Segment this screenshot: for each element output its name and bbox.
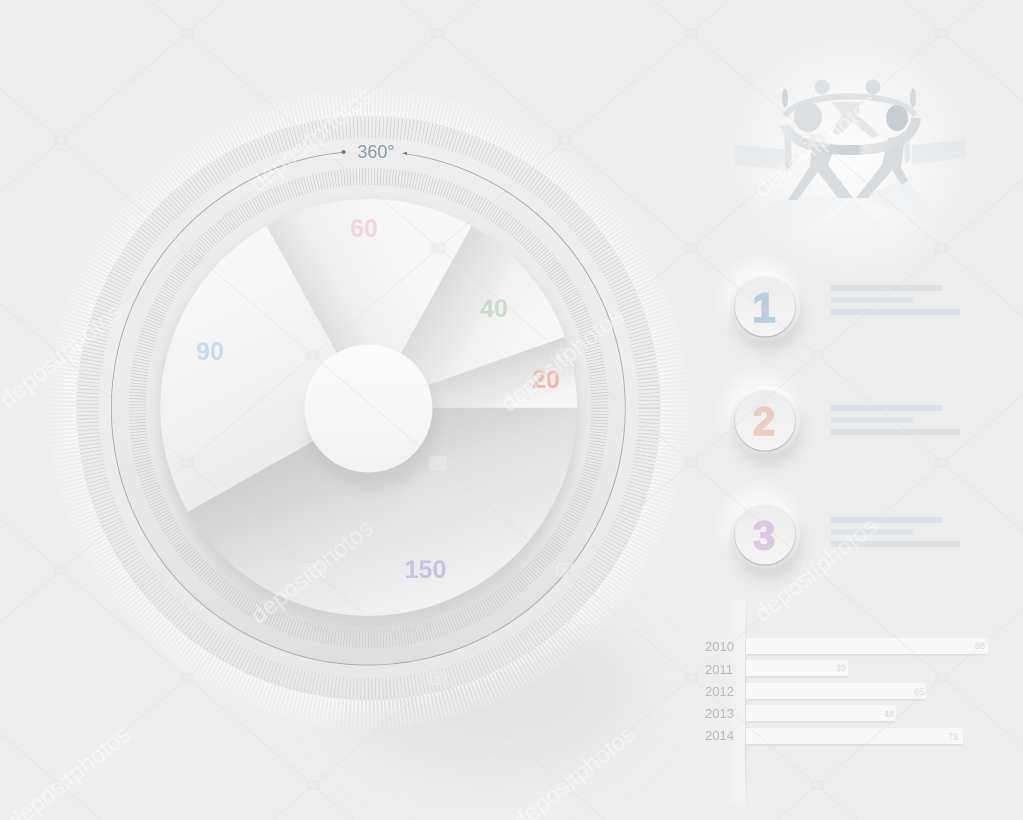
value labels (836, 641, 985, 742)
button inner ring (734, 276, 796, 337)
year labels: 2013 (705, 706, 734, 721)
arc arrow head (402, 152, 407, 155)
bar 2011 (746, 660, 848, 676)
slice: 150 (188, 408, 577, 616)
button inner ring (734, 504, 796, 565)
people icon: paper chain circle (725, 30, 975, 280)
button disc (730, 386, 800, 456)
text lines (831, 517, 960, 547)
radial wheel gauge (62, 102, 674, 714)
white glow (725, 30, 975, 280)
year labels: 2010 (705, 639, 734, 654)
value labels: 88 (975, 641, 985, 651)
front person right (856, 136, 908, 198)
value labels: 39 (836, 663, 846, 673)
inner tick ring (137, 176, 600, 640)
front person left (788, 140, 853, 200)
slice: 40 (395, 226, 565, 388)
bar chart (705, 600, 988, 805)
360 degree arc (111, 152, 625, 665)
numeral 2: 2 (753, 400, 775, 444)
button glow (714, 252, 806, 344)
button shadow (733, 283, 803, 353)
list item 3 (714, 480, 960, 581)
slice: 20 (420, 337, 577, 408)
label 20: 20 (532, 366, 560, 394)
side figure right (910, 88, 916, 108)
back person bodies (832, 102, 880, 138)
axis shadow (745, 600, 746, 805)
pie chart (158, 199, 580, 627)
value labels: 73 (948, 732, 958, 742)
side figure left (782, 88, 788, 108)
back band (785, 96, 915, 116)
hub (304, 344, 432, 472)
year labels: 2014 (705, 728, 734, 743)
numeral 1: 1 (752, 284, 776, 331)
bar 2014 (746, 728, 963, 744)
button inner ring (734, 390, 796, 451)
inner disc (112, 151, 626, 665)
wheel drop shadow (350, 615, 630, 765)
hub shadow (307, 359, 437, 489)
bar shadows (747, 650, 987, 745)
bar 2013 (746, 705, 896, 721)
list item 1 (714, 252, 960, 353)
text lines (831, 285, 960, 315)
slice: 90 (160, 226, 368, 512)
back person left (814, 80, 830, 94)
text lines (831, 405, 960, 435)
label 60: 60 (350, 215, 378, 243)
back person right (866, 80, 880, 94)
numeral 3: 3 (753, 514, 775, 558)
pie shadow (158, 205, 580, 627)
label 150: 150 (405, 556, 446, 584)
watermark text: depositphotos (246, 515, 379, 630)
side arm right (904, 125, 910, 165)
watermark text: depositphotos (245, 83, 378, 198)
360 degree label: 360° (357, 142, 395, 162)
button glow (714, 480, 806, 572)
slice: 150 shadow overlay (188, 440, 420, 616)
button glow (714, 366, 806, 458)
slice: 60 (266, 199, 472, 408)
people cast shadows (735, 140, 965, 250)
year labels (705, 639, 734, 743)
label 90: 90 (196, 338, 224, 366)
side arm left (784, 125, 792, 172)
bar 2012 (746, 683, 926, 699)
watermark text: depositphotos (750, 89, 883, 204)
outer white tick ring (62, 102, 674, 714)
button shadow (733, 511, 803, 581)
list item 2 (714, 366, 960, 467)
arc start dot (342, 150, 346, 154)
wheel base disc (76, 116, 660, 700)
front head left (794, 102, 822, 132)
button disc (730, 272, 800, 342)
front head right (886, 105, 908, 131)
value labels: 48 (884, 709, 894, 719)
button disc (730, 500, 800, 570)
button shadow (733, 397, 803, 467)
front band (785, 118, 916, 150)
year labels: 2011 (705, 662, 733, 677)
value labels: 65 (914, 687, 924, 697)
watermark text (0, 83, 883, 820)
watermark text: depositphotos (750, 513, 883, 628)
year labels: 2012 (705, 684, 734, 699)
bar 2010 (746, 638, 988, 654)
label 40: 40 (480, 295, 508, 323)
outer grey tick ring (88, 127, 650, 689)
axis strip (725, 600, 745, 805)
watermark text: depositphotos (496, 303, 629, 418)
